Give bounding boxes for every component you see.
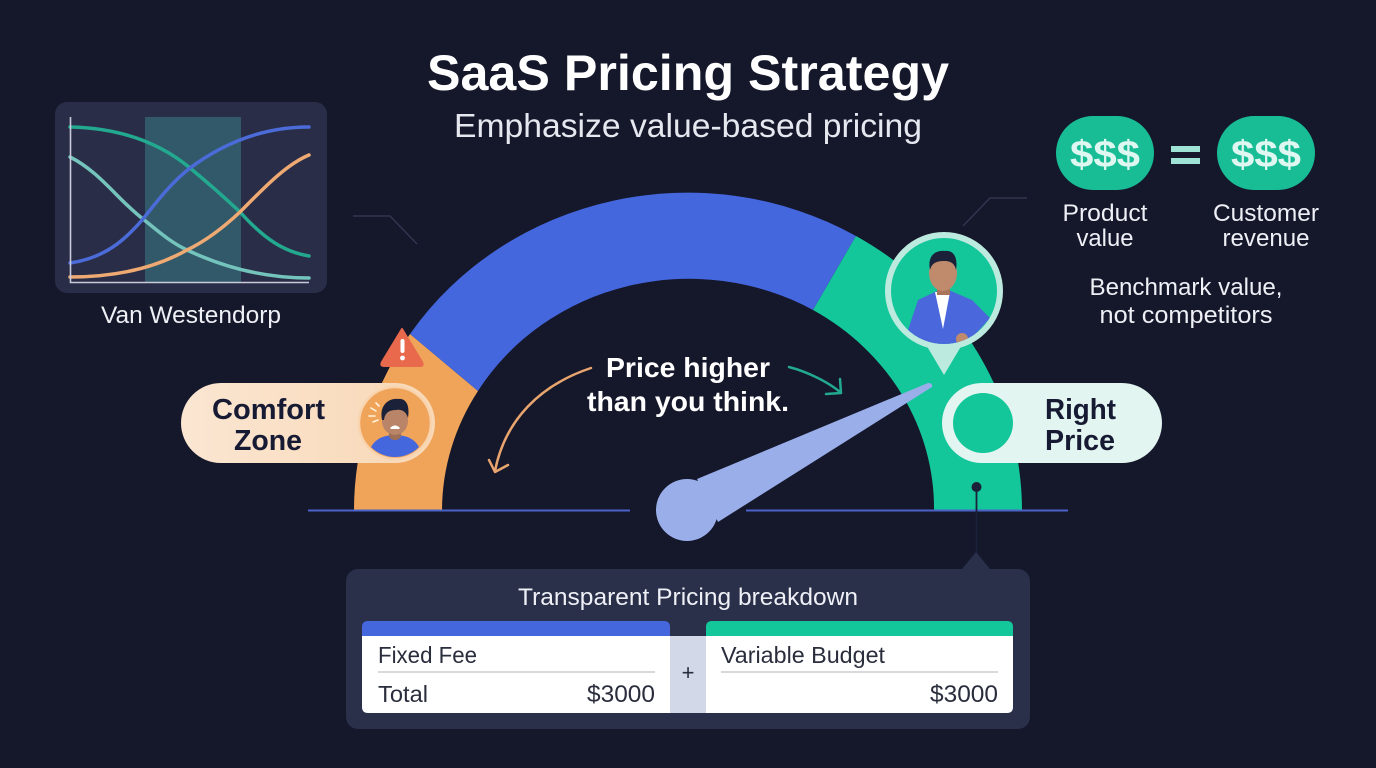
arrow: toward right price [789,367,841,394]
panel: Transparent Pricing breakdown [346,552,1030,729]
label: Comfort Zone [212,394,325,457]
panel: Van Westendorp chart [55,102,327,293]
icon: confident person badge [888,235,1000,375]
plus connector: + [682,660,694,685]
text: benchmark note: Benchmark value, [1090,274,1282,301]
label: product value: value [1076,225,1134,252]
baseline axis [308,510,1068,512]
label: customer revenue: revenue [1222,225,1310,252]
label: customer revenue [1213,200,1319,252]
arrow: toward comfort zone [489,368,591,472]
badge: customer revenue: $$$ [1231,134,1301,176]
card: Variable Budget: Variable Budget [721,642,886,668]
label: customer revenue: Customer [1213,200,1319,227]
equals sign [1171,146,1200,164]
card: Fixed Fee: Total [378,681,428,707]
panel heading: Transparent Pricing breakdown [518,584,858,611]
card: Fixed Fee: $3000 [587,681,655,708]
card: Variable Budget [706,621,1013,713]
title: SaaS Pricing Strategy [427,45,949,101]
icon: warning triangle [381,329,423,366]
label: product value [1062,200,1148,252]
text: benchmark note: not competitors [1100,302,1272,329]
card: Variable Budget: $3000 [930,681,998,708]
card: Fixed Fee [362,621,670,713]
subtitle: Emphasize value-based pricing [454,107,922,144]
text: Price higher than you think: Price higher [606,352,770,383]
callout: Right Price [942,383,1162,463]
card: Fixed Fee: Fixed Fee [378,642,477,668]
badge: customer revenue [1217,116,1315,190]
gauge arc [354,193,1022,510]
text: benchmark note [1090,274,1282,329]
text: Price higher than you think [587,352,789,417]
badge: product value: $$$ [1070,134,1140,176]
label: Right Price: Right [1045,394,1116,426]
chart label: Van Westendorp [101,302,281,329]
label: Right Price: Price [1045,425,1115,457]
plus connector [670,636,706,713]
label: Comfort Zone: Zone [234,425,302,457]
text: Price higher than you think: than you think. [587,386,789,417]
equation: product value equals customer revenue [1056,116,1319,252]
label: Comfort Zone: Comfort [212,394,325,426]
marker pin [972,482,982,556]
label: Right Price [1045,394,1116,457]
label: product value: Product [1062,200,1148,227]
gauge needle [656,383,932,541]
badge: product value [1056,116,1154,190]
icon: worried person [359,387,431,462]
callout: Comfort Zone [181,383,435,463]
